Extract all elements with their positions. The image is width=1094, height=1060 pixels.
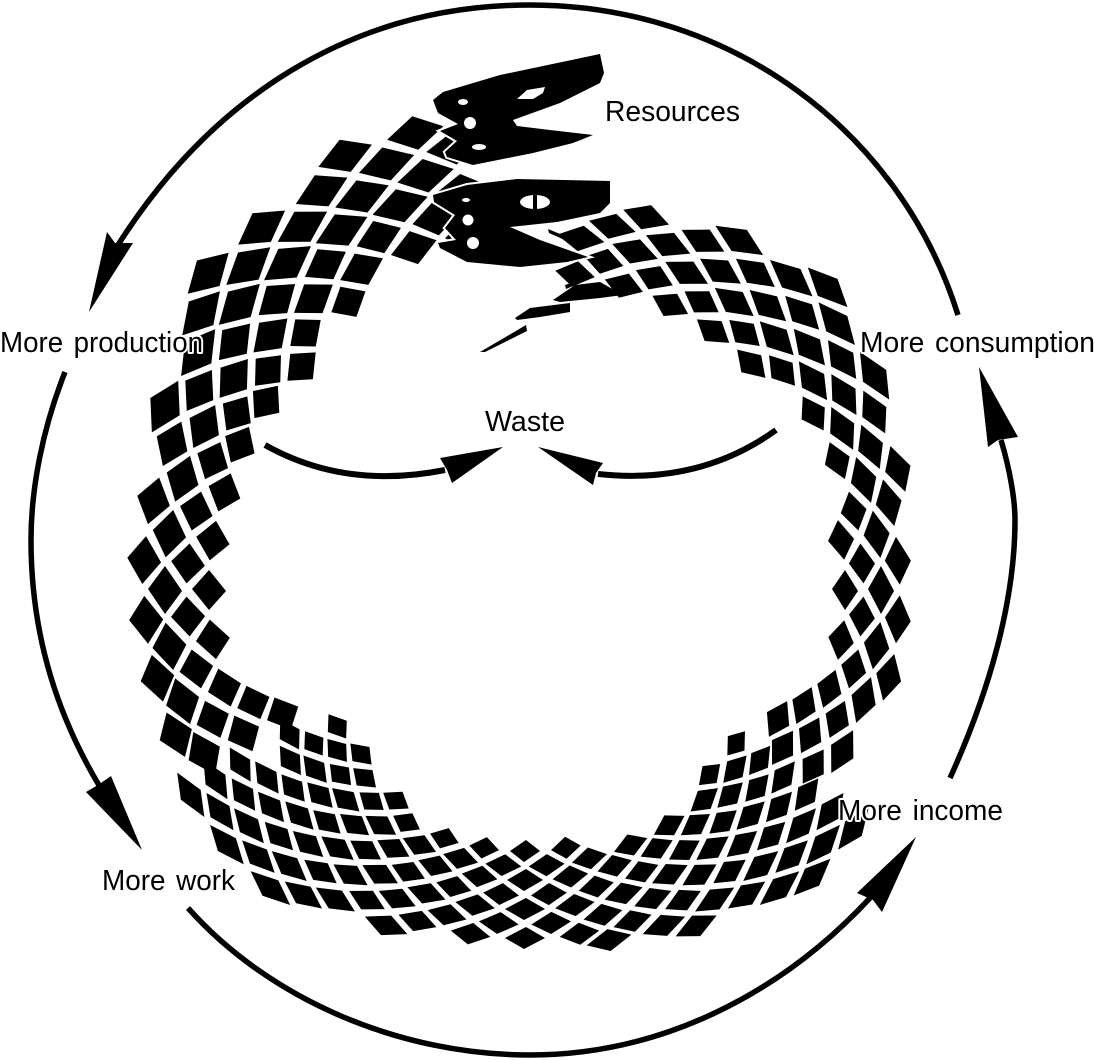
arrow: work to income [188, 837, 916, 1055]
label: Waste: Waste [485, 406, 565, 438]
label: Resources: Resources [605, 96, 740, 128]
arrow: production to work [31, 372, 142, 850]
arrow: waste right [538, 430, 776, 485]
upper snake head [433, 54, 604, 165]
label: More work: More work [102, 865, 235, 897]
label: More production: More production [0, 327, 203, 359]
label: More income: More income [838, 795, 1003, 827]
snake bodies with scales [125, 110, 918, 956]
lower snake head [433, 179, 610, 267]
arrow: consumption to production [89, 5, 958, 315]
arrow: waste left [265, 445, 503, 483]
arrow: income to consumption [950, 367, 1018, 778]
